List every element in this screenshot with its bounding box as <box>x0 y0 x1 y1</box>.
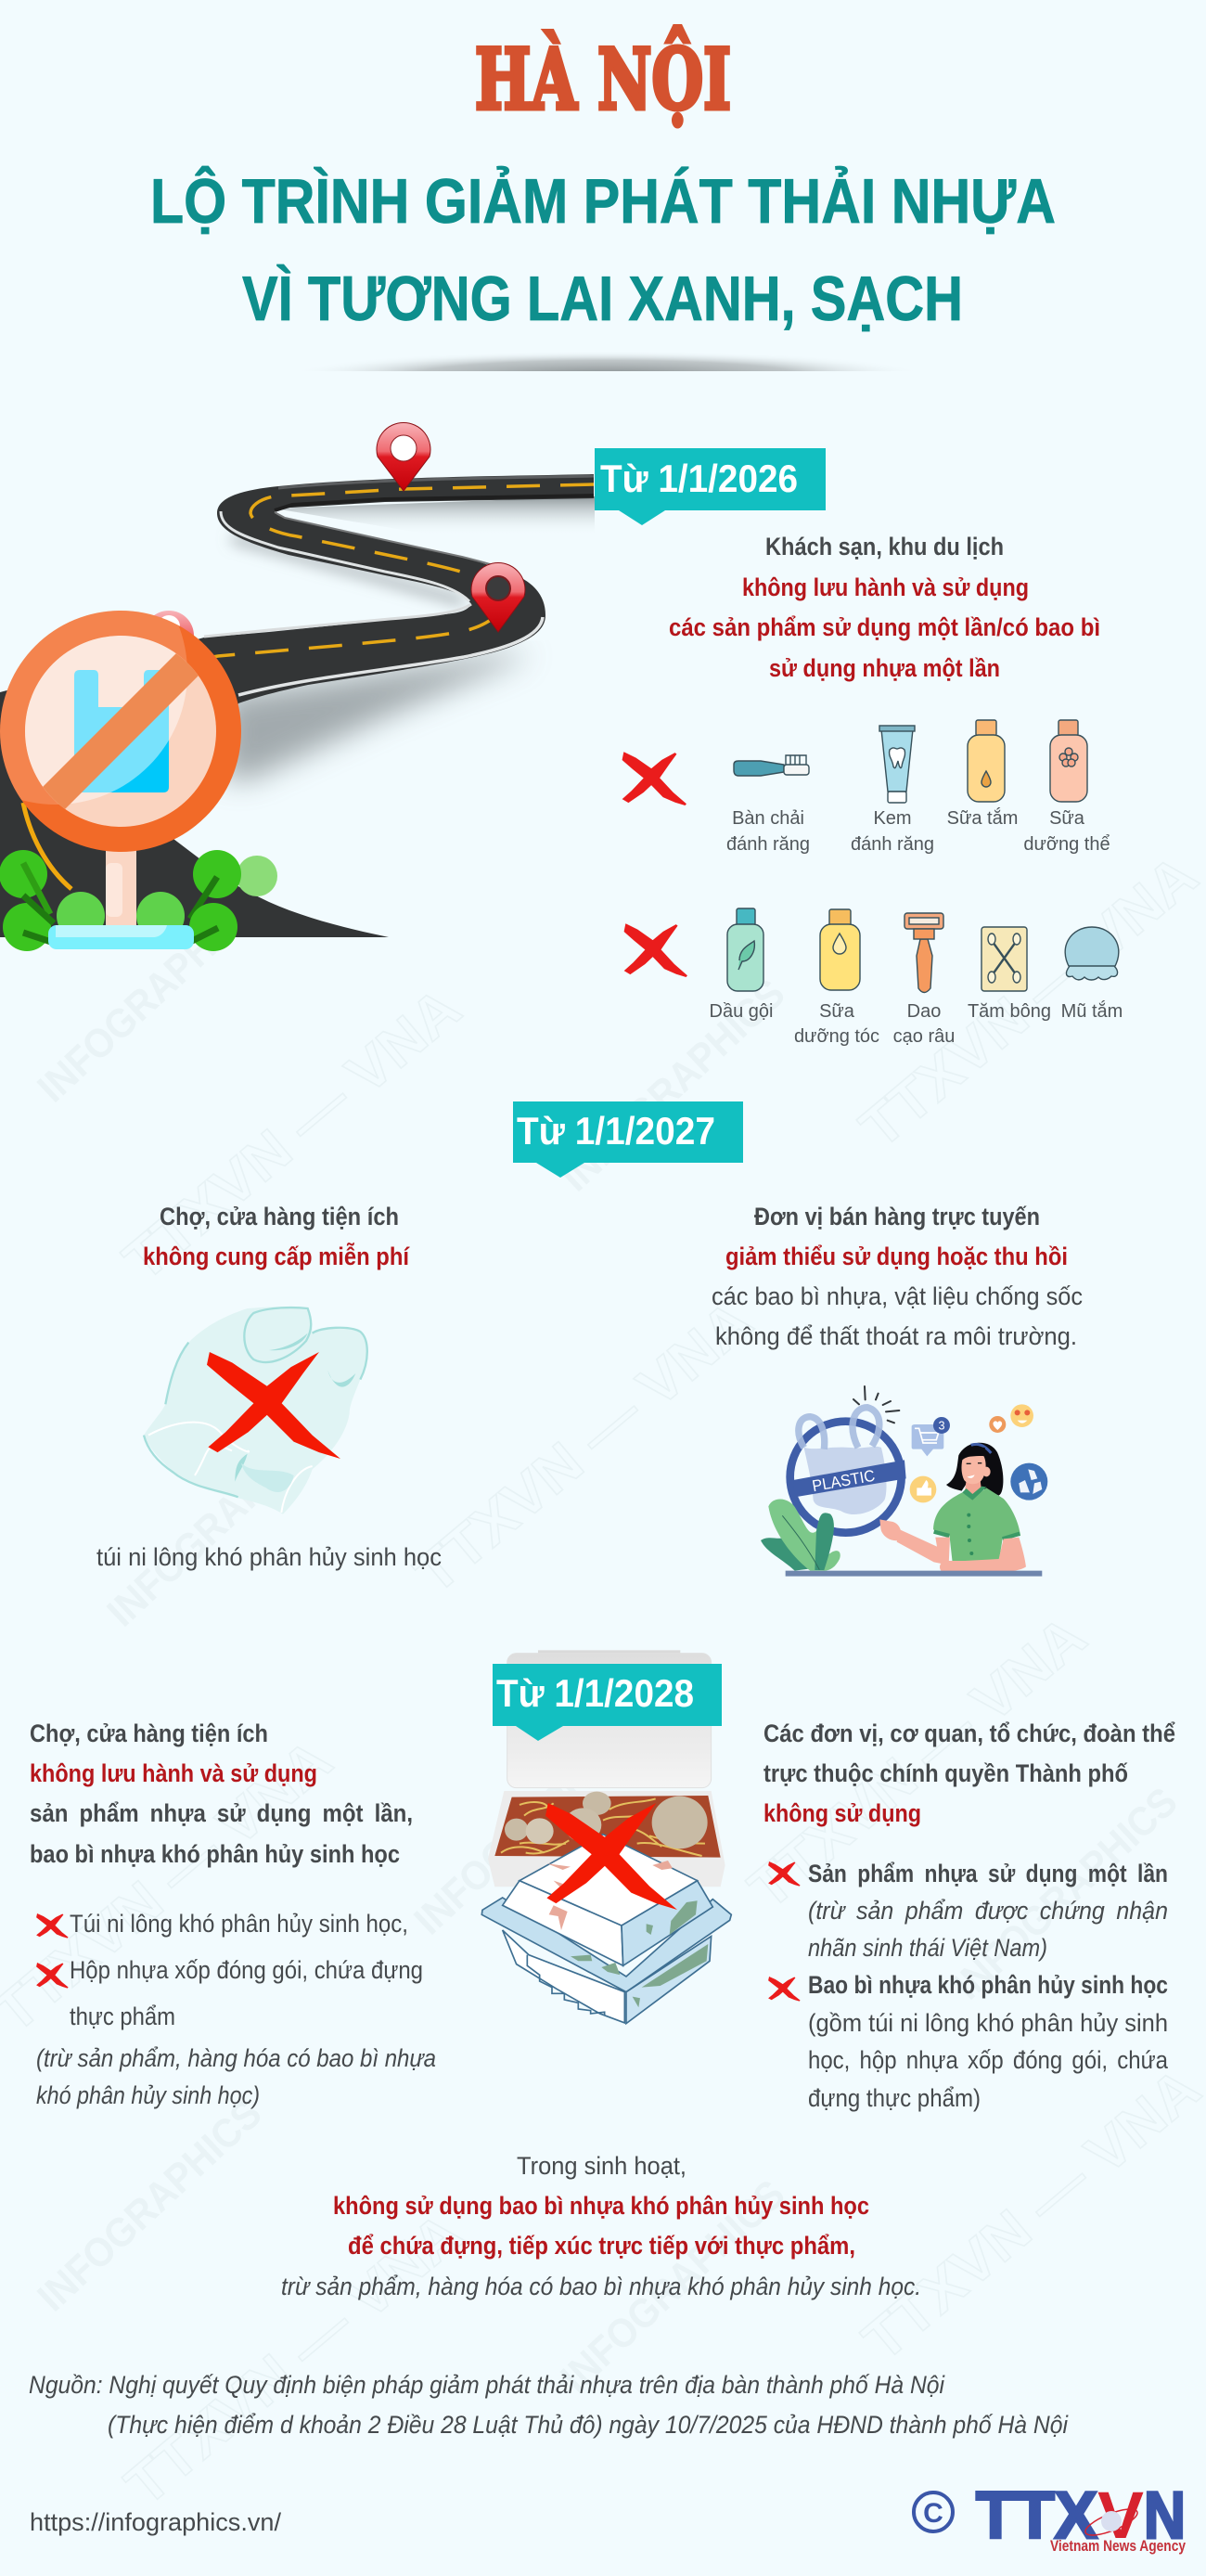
labels row 2: Sữa <box>819 1001 855 1022</box>
labels row 1: đánh răng <box>851 834 934 855</box>
labels row 2: Tăm bông <box>968 1001 1051 1022</box>
text: TTXVN — VNA <box>112 976 473 1294</box>
no-plastic sign <box>0 611 241 852</box>
text: INFOGRAPHICS <box>98 1406 340 1635</box>
date badge 2026 <box>595 448 826 525</box>
list: banned items right: học, hộp nhựa xốp đóng gói, chứa <box>808 2046 1169 2074</box>
text: INFOGRAPHICS <box>944 1779 1187 2008</box>
TTXVN logo: N <box>1144 2479 1186 2553</box>
icon: plastic bag with cross <box>144 1307 367 1514</box>
list: banned items right: đựng thực phẩm) <box>808 2084 981 2112</box>
website url: https://infographics.vn/ <box>30 2508 281 2536</box>
list: banned items right: (gồm túi ni lông khó phân hủy sinh <box>808 2009 1168 2037</box>
list: banned items right: (trừ sản phẩm được chứng nhận <box>808 1897 1168 1925</box>
labels row 1 <box>726 807 1110 855</box>
map pin 1 <box>377 422 430 491</box>
text block: 2026 rule <box>669 533 1100 682</box>
text block: daily life: để chứa đựng, tiếp xúc trực tiếp với thực phẩm, <box>348 2232 855 2260</box>
title: Hà Nội: HÀ NỘI <box>475 26 731 129</box>
icon: body lotion <box>1050 720 1087 802</box>
icon: conditioner <box>820 909 860 990</box>
text block: markets 2027: không cung cấp miễn phí <box>143 1242 410 1270</box>
list: banned items left: Hộp nhựa xốp đóng gói, chứa đựng <box>70 1956 423 1984</box>
text block: daily life: Trong sinh hoạt, <box>517 2152 686 2180</box>
winding road illustration <box>0 474 595 937</box>
date badge 2028: Từ 1/1/2028 <box>496 1671 694 1715</box>
icon: toothbrush <box>734 755 809 776</box>
labels row 1: Sữa tắm <box>947 807 1018 829</box>
list: banned items left: (trừ sản phẩm, hàng hóa có bao bì nhựa <box>36 2044 436 2072</box>
text block: 2026 rule: sử dụng nhựa một lần <box>769 654 1000 682</box>
labels row 2: Dao <box>907 1001 941 1022</box>
no-plastic sign post <box>48 849 194 949</box>
list: banned items left: Túi ni lông khó phân hủy sinh học, <box>70 1910 408 1938</box>
date badge 2027: Từ 1/1/2027 <box>517 1109 715 1153</box>
labels row 1: Kem <box>873 808 912 829</box>
text: INFOGRAPHICS <box>552 971 794 1200</box>
text block: daily life: trừ sản phẩm, hàng hóa có bao bì nhựa khó phân hủy sinh học. <box>281 2273 921 2300</box>
list: banned items right: nhãn sinh thái Việt Nam) <box>808 1934 1047 1962</box>
labels row 1: Sữa <box>1049 808 1085 829</box>
source note <box>29 2371 1069 2439</box>
text block: 2026 rule: Khách sạn, khu du lịch <box>765 533 1004 560</box>
red cross on food box <box>545 1803 677 1910</box>
illustration: woman pointing at plastic bag: PLASTIC <box>811 1466 877 1495</box>
illustration: woman pointing at plastic bag: 3 <box>938 1420 945 1433</box>
text block: online sellers 2027: các bao bì nhựa, vật liệu chống sốc <box>712 1282 1083 1310</box>
icon: razor <box>904 913 943 993</box>
text block: markets 2027: Chợ, cửa hàng tiện ích <box>160 1203 399 1230</box>
text block: daily life <box>281 2152 921 2300</box>
list: banned items left <box>36 1910 436 2109</box>
text block: markets 2028: bao bì nhựa khó phân hủy sinh học <box>30 1840 400 1868</box>
TTXVN logo: V <box>1097 2479 1144 2553</box>
caption: plastic bag: túi ni lông khó phân hủy sinh học <box>96 1543 442 1571</box>
icon: toothpaste <box>879 726 915 803</box>
text block: agencies 2028: không sử dụng <box>763 1799 921 1827</box>
red cross row 2 <box>625 925 686 976</box>
text block: online sellers 2027 <box>712 1203 1083 1350</box>
copyright mark <box>914 2492 953 2531</box>
labels row 2 <box>710 1000 1123 1047</box>
labels row 2: Mũ tắm <box>1061 1000 1123 1022</box>
text block: online sellers 2027: Đơn vị bán hàng trực tuyến <box>754 1203 1040 1230</box>
labels row 1: dưỡng thể <box>1023 834 1110 855</box>
icon: shower gel <box>968 720 1005 802</box>
text block: markets 2027 <box>143 1203 410 1270</box>
icon: shampoo <box>727 908 763 991</box>
text: INFOGRAPHICS <box>552 2171 794 2401</box>
illustration: woman pointing at plastic bag <box>761 1386 1047 1577</box>
list: banned items right <box>769 1860 1169 2112</box>
labels row 2: Dầu gội <box>710 1001 773 1022</box>
text block: markets 2028 <box>30 1719 413 1868</box>
icon: cotton swabs <box>981 927 1027 991</box>
text block: daily life: không sử dụng bao bì nhựa khó phân hủy sinh học <box>333 2192 869 2220</box>
date badge 2028 <box>493 1664 722 1741</box>
title line 2: VÌ TƯƠNG LAI XANH, SẠCH <box>242 264 963 334</box>
text block: agencies 2028 <box>763 1719 1175 1827</box>
text block: online sellers 2027: giảm thiểu sử dụng hoặc thu hồi <box>725 1243 1068 1270</box>
labels row 2: dưỡng tóc <box>794 1026 879 1047</box>
labels row 1: đánh răng <box>726 834 810 855</box>
date badge 2027 <box>513 1101 743 1178</box>
text block: markets 2028: không lưu hành và sử dụng <box>30 1759 317 1787</box>
labels row 2: cạo râu <box>893 1026 955 1047</box>
text: INFOGRAPHICS <box>29 2091 271 2320</box>
copyright mark: C <box>923 2498 943 2529</box>
red cross row 1 <box>623 753 686 805</box>
text: TTXVN — VNA <box>852 2056 1206 2374</box>
TTXVN logo: TTX <box>976 2479 1097 2553</box>
title line 1: LỘ TRÌNH GIẢM PHÁT THẢI NHỰA <box>150 165 1056 237</box>
list: banned items left: thực phẩm <box>70 2003 175 2030</box>
text: TTXVN — VNA <box>404 1289 764 1606</box>
map pin 3 <box>144 611 194 668</box>
date badge 2026: Từ 1/1/2026 <box>600 457 798 500</box>
text block: 2026 rule: các sản phẩm sử dụng một lần/có bao bì <box>669 613 1100 641</box>
text: INFOGRAPHICS <box>29 882 271 1111</box>
TTXVN logo <box>976 2479 1186 2555</box>
text block: online sellers 2027: không để thất thoát ra môi trường. <box>715 1322 1077 1350</box>
source note: Nguồn: Nghị quyết Quy định biện pháp giảm phát thải nhựa trên địa bàn thành phố Hà Nội <box>29 2371 945 2399</box>
text: TTXVN — VNA <box>114 2201 475 2518</box>
text: INFOGRAPHICS <box>405 1714 648 1943</box>
text block: agencies 2028: trực thuộc chính quyền Thành phố <box>763 1759 1128 1787</box>
text: TTXVN — VNA <box>738 1604 1098 1922</box>
icon: shower cap <box>1065 927 1119 980</box>
title shadow <box>343 354 872 371</box>
text block: 2026 rule: không lưu hành và sử dụng <box>742 573 1029 601</box>
text: TTXVN — VNA <box>849 844 1206 1161</box>
list: banned items left: khó phân hủy sinh học) <box>36 2081 260 2109</box>
map pin 2 <box>471 562 525 632</box>
text block: markets 2028: Chợ, cửa hàng tiện ích <box>30 1719 268 1747</box>
illustration: food box and foam tray <box>481 1650 731 2024</box>
source note: (Thực hiện điểm d khoản 2 Điều 28 Luật Thủ đô) ngày 10/7/2025 của HĐND thành phố Hà Nội <box>108 2411 1069 2439</box>
text block: markets 2028: sản phẩm nhựa sử dụng một lần, <box>30 1799 413 1827</box>
bushes <box>0 850 277 951</box>
labels row 1: Bàn chải <box>732 808 804 829</box>
